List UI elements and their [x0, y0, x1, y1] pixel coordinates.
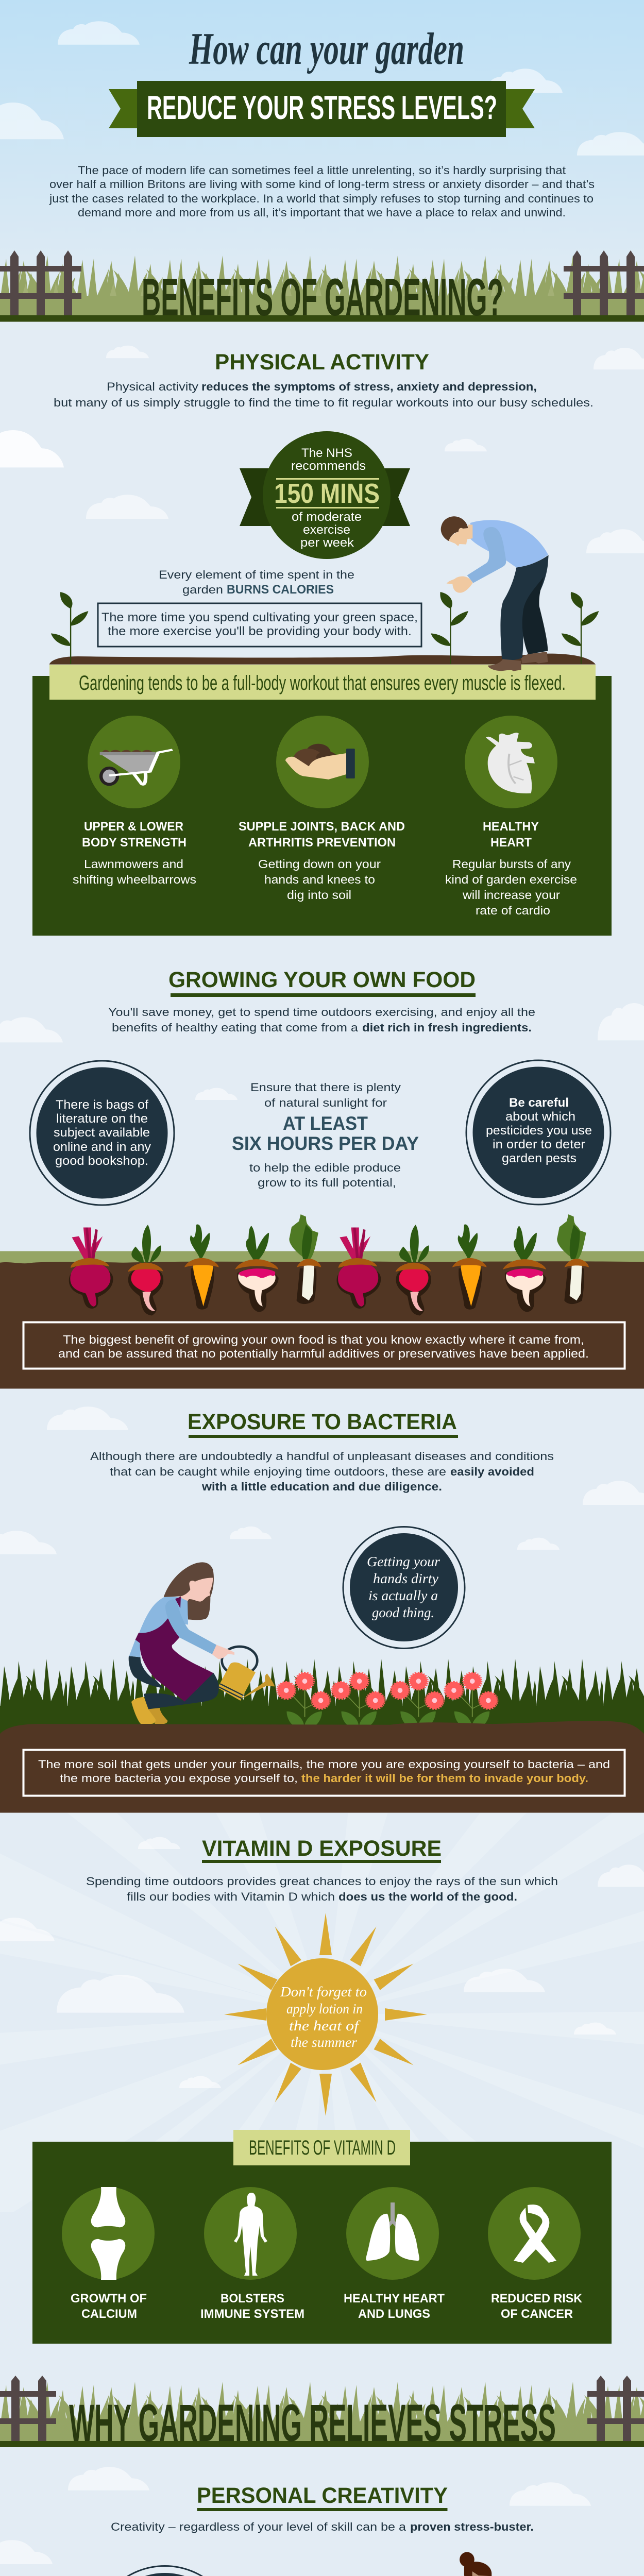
NHS badge: per week [300, 536, 354, 550]
panel: full-body workout [32, 665, 612, 936]
burns calories text: garden [182, 583, 223, 596]
background clouds: bacteria [0, 1406, 644, 1554]
background clouds: food [0, 1003, 644, 1100]
icon: lungs [346, 2187, 439, 2280]
column descriptions: shifting wheelbarrows [73, 873, 196, 886]
heading: physical activity: PHYSICAL ACTIVITY [215, 350, 429, 375]
column descriptions [73, 857, 577, 917]
growing food text: You'll save money, get to spend time outdoors exercising, and enjoy all the [108, 1006, 535, 1019]
callout: dirty hands: Getting your [367, 1554, 440, 1569]
heading: growing your own food: GROWING YOUR OWN FOOD [168, 968, 476, 992]
vitamin d labels: OF CANCER [501, 2307, 573, 2321]
flowers [278, 1673, 497, 1725]
growing food text: benefits of healthy eating that come from a [112, 1021, 359, 1034]
icon: ribbon [488, 2187, 581, 2280]
soil mound [49, 654, 596, 665]
callout box: biggest benefit [24, 1322, 624, 1368]
header banner: benefits of gardening [0, 250, 644, 327]
NHS badge: recommends [291, 459, 366, 473]
soil with callout: the harder it will be for them to invade your body. [301, 1772, 588, 1785]
vitamin d labels: IMMUNE SYSTEM [200, 2307, 304, 2321]
callout: dirty hands: is actually a [368, 1588, 438, 1603]
callout: 45 minutes [93, 2566, 237, 2576]
column descriptions: Regular bursts of any [452, 857, 571, 871]
bacteria text: Although there are undoubtedly a handful of unpleasant diseases and conditions [90, 1450, 554, 1463]
vitamin d text: Spending time outdoors provides great chances to enjoy the rays of the sun which [86, 1875, 558, 1888]
physical activity text: but many of us simply struggle to find the time to fit regular workouts into our busy schedules. [54, 396, 594, 409]
physical activity text: reduces the symptoms of stress, anxiety and depression, [201, 380, 537, 393]
title ribbon [109, 81, 535, 137]
creativity text [111, 2520, 534, 2533]
icon: seedlings [51, 592, 599, 664]
icon: sun with note [224, 1913, 427, 2116]
callout box: biggest benefit: The biggest benefit of growing your own food is that you know exactly where it came from, [63, 1333, 584, 1346]
sunlight text: SIX HOURS PER DAY [232, 1133, 419, 1154]
callout: pesticides: in order to deter [493, 1138, 585, 1151]
background sun rays [0, 1700, 644, 2318]
intro text: over half a million Britons are living with some kind of long-term stress or anxiety disorder – and that’s [49, 178, 595, 191]
NHS badge: 150 MINS [274, 478, 380, 509]
callout: pesticides [466, 1060, 611, 1205]
bacteria text [90, 1450, 554, 1493]
callout: literature: literature on the [56, 1112, 148, 1126]
panel: benefits of vitamin d: BENEFITS OF VITAMIN D [249, 2137, 396, 2159]
callout: literature: good bookshop. [55, 1154, 148, 1168]
growing food text [108, 1006, 535, 1034]
vitamin d labels: CALCIUM [81, 2307, 137, 2321]
header banner: why gardening relieves stress [0, 2376, 644, 2452]
heading: personal creativity: PERSONAL CREATIVITY [197, 2483, 448, 2508]
grass border [0, 1657, 644, 1742]
intro text: just the cases related to the workplace. In a world that simply refuses to stop turning and continues to [49, 192, 594, 205]
icon: bone joint [62, 2187, 155, 2280]
intro text [49, 164, 595, 219]
garden scene: bushes, table, chairs [19, 2552, 633, 2576]
vitamin d labels: HEALTHY HEART [344, 2292, 445, 2306]
callout box: biggest benefit: and can be assured that no potentially harmful additives or preservatives have been applied. [58, 1347, 589, 1360]
burns calories text: Every element of time spent in the [159, 568, 354, 581]
icon: sun with note: apply lotion in [286, 2001, 363, 2016]
sunlight text: grow to its full potential, [258, 1176, 396, 1189]
vitamin d labels: REDUCED RISK [491, 2292, 583, 2306]
callout: pesticides: Be careful [509, 1096, 569, 1110]
woman watering [129, 1562, 275, 1724]
column descriptions: kind of garden exercise [445, 873, 577, 886]
icon: sun with note: Don't forget to [280, 1984, 367, 1999]
icon: anatomical heart [465, 716, 557, 808]
column descriptions: Lawnmowers and [84, 857, 183, 871]
column titles: ARTHRITIS PREVENTION [248, 836, 396, 850]
icon: hand holding soil [276, 716, 369, 808]
title script line: How can your garden [189, 24, 464, 74]
soil with callout: The more soil that gets under your fingernails, the more you are exposing yourself to bacteria – and [38, 1758, 610, 1771]
physical activity text [54, 380, 594, 409]
callout: literature: subject available [54, 1126, 150, 1140]
callout: literature: There is bags of [56, 1098, 148, 1112]
NHS badge: of moderate [292, 510, 362, 524]
column titles: BODY STRENGTH [82, 836, 187, 850]
callout: literature: online and in any [53, 1140, 151, 1154]
background clouds: vitamin d [0, 1837, 644, 2088]
intro text: demand more and more from us all, it’s important that we have a place to relax and unwind. [78, 206, 566, 219]
vitamin d labels: AND LUNGS [358, 2307, 430, 2321]
column titles: HEART [490, 836, 532, 850]
callout box: cultivating [98, 603, 421, 647]
heading: vitamin d exposure: VITAMIN D EXPOSURE [202, 1836, 442, 1861]
column descriptions: will increase your [462, 888, 560, 902]
soil with callout: the more bacteria you expose yourself to, [60, 1772, 298, 1785]
column descriptions: Getting down on your [258, 857, 381, 871]
callout: dirty hands: hands dirty [373, 1571, 438, 1586]
callout: dirty hands: good thing. [372, 1605, 434, 1620]
bacteria text: with a little education and due diligence. [201, 1480, 442, 1493]
column descriptions: dig into soil [287, 888, 351, 902]
vitamin d labels: BOLSTERS [221, 2292, 284, 2306]
vitamin d text [86, 1875, 558, 1903]
soil with callout [0, 1721, 644, 1813]
sunlight text: Ensure that there is plenty [250, 1081, 401, 1094]
column titles: HEALTHY [483, 820, 539, 834]
sunlight text: of natural sunlight for [264, 1096, 387, 1109]
vegetable patch [0, 1214, 644, 1388]
sunlight text: AT LEAST [283, 1113, 368, 1134]
sunlight text [232, 1081, 419, 1189]
column titles [82, 820, 539, 850]
bacteria text: that can be caught while enjoying time outdoors, these are [110, 1465, 446, 1478]
icon: sun with note: the heat of [289, 2018, 361, 2033]
icon: human body [204, 2187, 297, 2280]
callout: dirty hands [343, 1527, 465, 1649]
icon: sun with note: the summer [291, 2035, 358, 2050]
background clouds: physical activity [0, 346, 644, 553]
man gardening [441, 516, 549, 671]
column descriptions: rate of cardio [476, 904, 550, 917]
vitamin d text: fills our bodies with Vitamin D which [127, 1890, 335, 1903]
NHS badge: exercise [303, 523, 350, 537]
callout box: cultivating: The more time you spend cultivating your green space, [101, 611, 418, 624]
callout box: cultivating: the more exercise you'll be providing your body with. [108, 624, 412, 638]
column titles: SUPPLE JOINTS, BACK AND [239, 820, 405, 834]
NHS badge: The NHS [301, 446, 352, 460]
callout: pesticides: pesticides you use [486, 1124, 592, 1138]
sunlight text: to help the edible produce [249, 1161, 401, 1174]
growing food text: diet rich in fresh ingredients. [362, 1021, 532, 1034]
column titles: UPPER & LOWER [84, 820, 183, 834]
NHS badge [240, 431, 410, 559]
burns calories text: BURNS CALORIES [227, 583, 334, 597]
physical activity text: Physical activity [107, 380, 199, 393]
panel: benefits of vitamin d [32, 2130, 612, 2344]
heading: exposure to bacteria: EXPOSURE TO BACTERIA [188, 1410, 457, 1434]
vitamin d labels [71, 2292, 583, 2321]
background sky [0, 0, 644, 319]
vitamin d text: does us the world of the good. [338, 1890, 517, 1903]
callout: literature [30, 1061, 174, 1205]
creativity text: Creativity – regardless of your level of skill can be a [111, 2520, 406, 2533]
column descriptions: hands and knees to [264, 873, 375, 886]
bacteria text: easily avoided [450, 1465, 534, 1478]
icon: wheelbarrow [88, 716, 180, 808]
intro text: The pace of modern life can sometimes feel a little unrelenting, so it’s hardly surprising that [78, 164, 566, 177]
callout: pesticides: about which [505, 1110, 575, 1124]
background clouds: header [0, 21, 644, 156]
vitamin d labels: GROWTH OF [71, 2292, 147, 2306]
creativity text: proven stress-buster. [410, 2520, 534, 2533]
painter [426, 2552, 527, 2576]
burns calories text [159, 568, 354, 597]
callout: pesticides: garden pests [502, 1151, 577, 1165]
background clouds: creativity [0, 2467, 644, 2576]
